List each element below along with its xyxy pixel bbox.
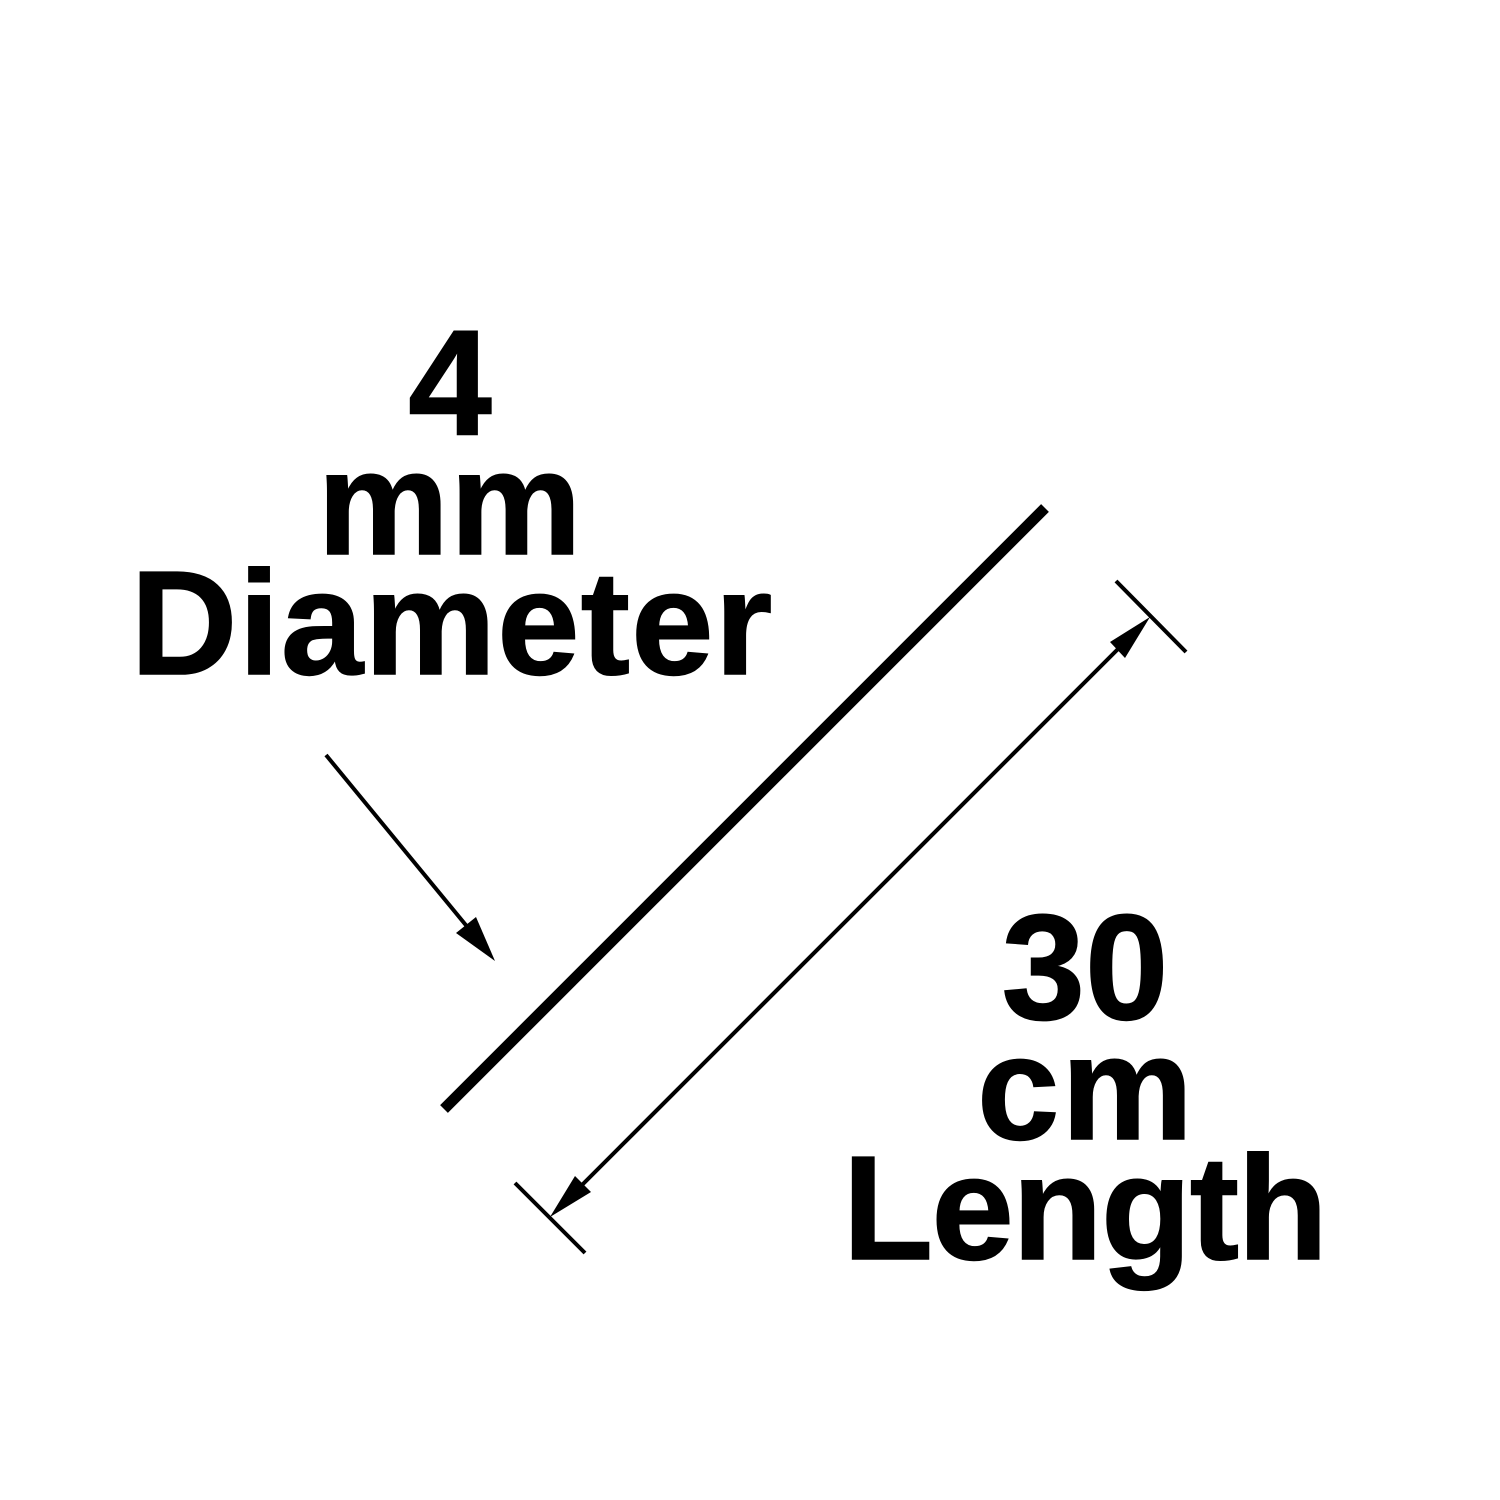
diameter label: mm: [317, 421, 583, 586]
length label: [843, 883, 1326, 1291]
length label: cm: [977, 1006, 1195, 1171]
arrow: diameter pointer: [326, 755, 495, 961]
diameter label: [130, 298, 774, 706]
diameter label: 4: [408, 298, 492, 466]
rod: [444, 508, 1045, 1109]
arrow: length dimension: [515, 581, 1186, 1253]
length label: 30: [1002, 883, 1168, 1051]
diameter label: Diameter: [130, 541, 774, 706]
length label: Length: [843, 1126, 1326, 1291]
